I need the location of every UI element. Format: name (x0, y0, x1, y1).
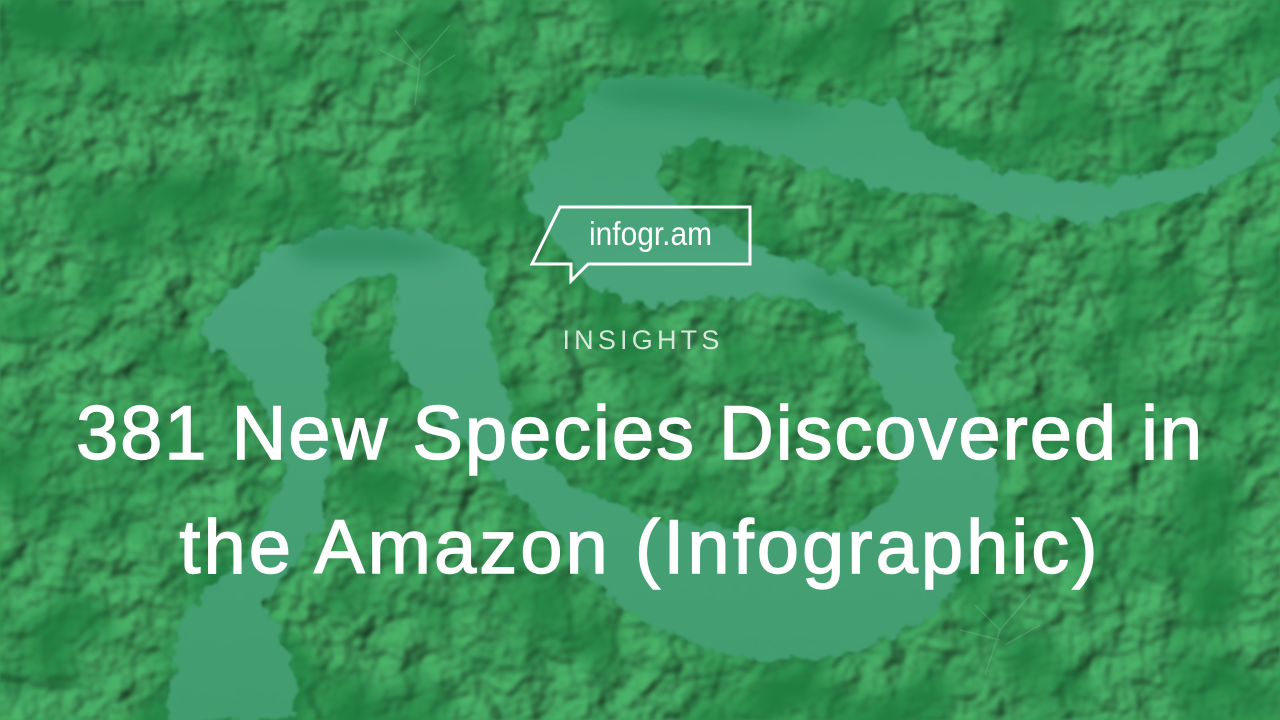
logo: infogr.am speech bubble: infogr.am (589, 215, 712, 252)
river bank shadow (165, 60, 1280, 720)
logo: infogr.am speech bubble (530, 206, 752, 284)
river shadows near banks (290, 80, 940, 335)
title: the Amazon (Infographic) (179, 505, 1101, 590)
title (76, 391, 1204, 590)
river (165, 60, 1280, 720)
bare trees (380, 25, 1040, 675)
subheading: insights: INSIGHTS (562, 325, 724, 355)
title: 381 New Species Discovered in (76, 391, 1204, 476)
